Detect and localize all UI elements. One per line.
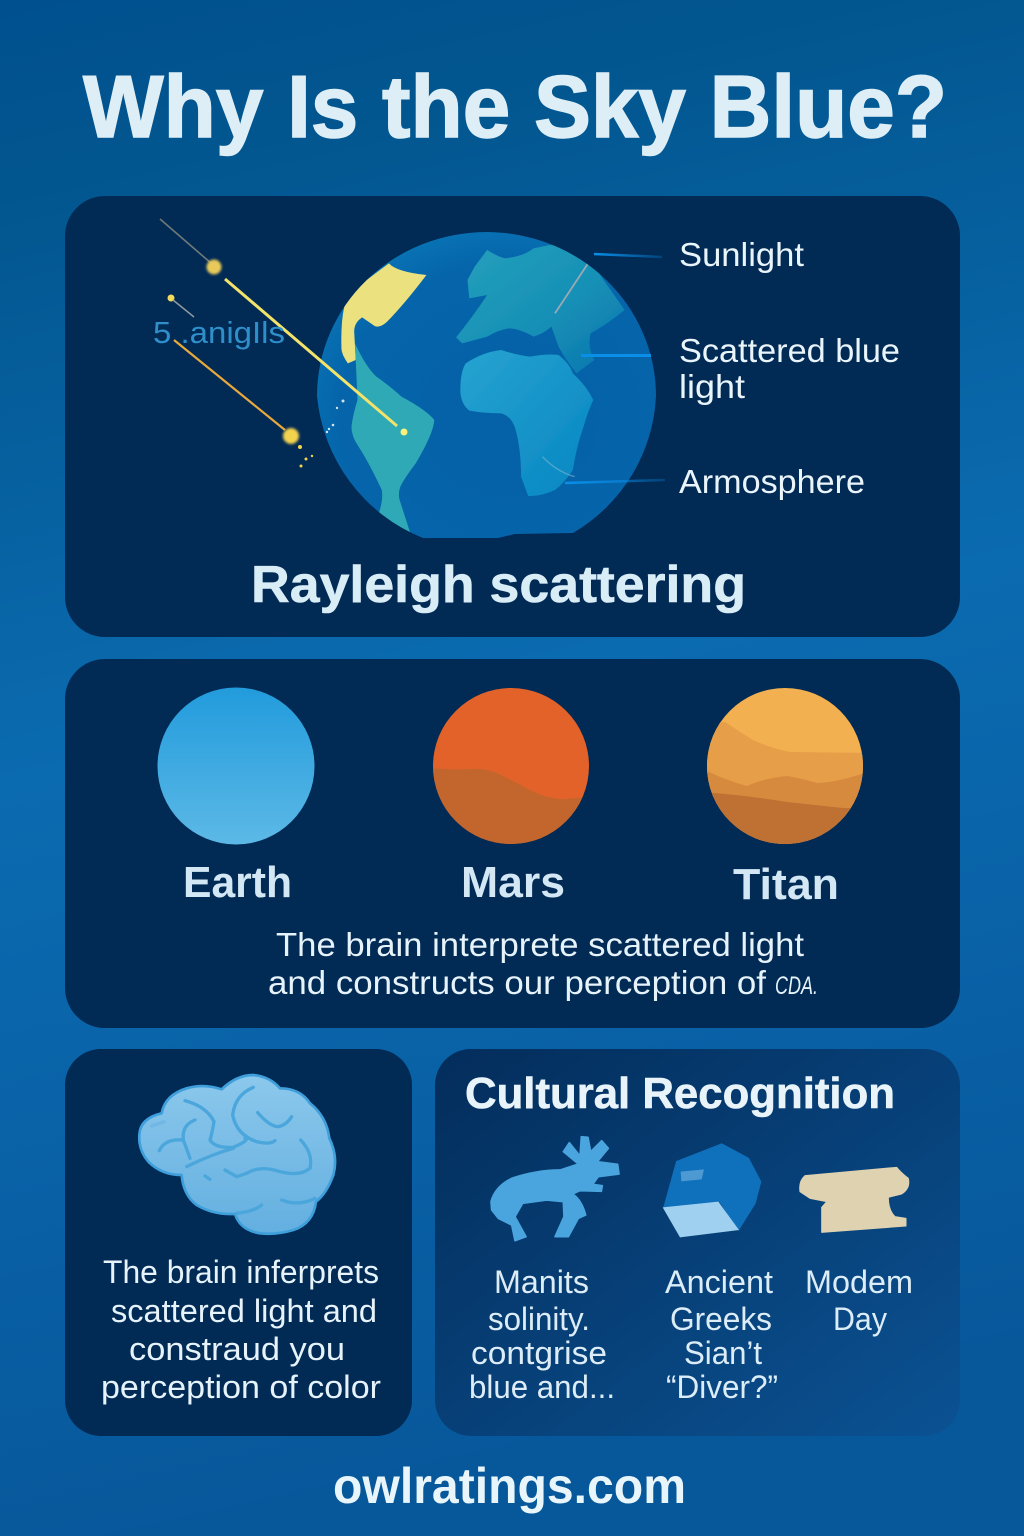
label: Scattered blue light <box>679 332 900 405</box>
text: Ancient Greeks column <box>665 1264 778 1405</box>
icon: Titan <box>707 688 863 844</box>
text block: perception: CDA. <box>775 972 818 1000</box>
text block: brain: scattered light and <box>111 1293 377 1329</box>
label: Mars: Mars <box>461 858 565 907</box>
text block: perception: The brain interprete scattered light <box>276 926 804 963</box>
panel: planets <box>65 659 960 1028</box>
label: Armosphere: Armosphere <box>679 463 865 500</box>
text: Ancient Greeks column: Greeks <box>670 1301 772 1337</box>
title: Why Is the Sky Blue? <box>83 57 947 156</box>
icon: Earth globe <box>310 225 665 545</box>
icon: Mars <box>433 688 589 844</box>
icon: beige column <box>800 1167 909 1232</box>
text: Manits column: blue and... <box>469 1369 615 1405</box>
text: Manits column <box>469 1264 615 1405</box>
text block: perception: and constructs our perception of <box>268 964 767 1001</box>
text block: perception <box>268 926 818 1001</box>
label: Titan: Titan <box>733 860 839 909</box>
text block: brain: perception of color <box>101 1369 381 1405</box>
arrow: sunlight ray lower <box>168 294 313 468</box>
text: Manits column: solinity. <box>488 1301 590 1337</box>
icon: blue book <box>663 1144 761 1237</box>
text: Modern Day column: Modem <box>805 1264 913 1300</box>
text: Modern Day column <box>805 1264 913 1337</box>
text: Ancient Greeks column: Sian’t <box>684 1335 762 1371</box>
text block: brain: The brain inferprets <box>103 1254 379 1290</box>
panel: Rayleigh scattering <box>65 196 960 637</box>
text: Ancient Greeks column: Ancient <box>665 1264 773 1300</box>
panel: Cultural Recognition <box>435 1049 960 1436</box>
text: Ancient Greeks column: “Diver?” <box>666 1369 778 1405</box>
heading: Cultural Recognition: Cultural Recognition <box>465 1069 895 1118</box>
label: Earth: Earth <box>183 858 292 907</box>
text block: brain: constraud you <box>129 1331 345 1367</box>
label: Scattered blue light: Scattered blue <box>679 332 900 369</box>
text: Manits column: contgrise <box>471 1335 607 1371</box>
callout line: scattered blue light <box>581 354 651 357</box>
callout line: sunlight <box>594 254 662 257</box>
garbled label: 5 .anigIls <box>153 315 285 350</box>
text: Modern Day column: Day <box>833 1301 887 1337</box>
panel: brain <box>65 1049 412 1436</box>
icon: Earth <box>158 688 314 844</box>
label: Sunlight: Sunlight <box>679 236 804 273</box>
arrow: sunlight ray main <box>160 219 408 436</box>
scattered dots <box>326 400 344 433</box>
icon: brain <box>139 1075 335 1234</box>
icon: animal <box>491 1137 619 1241</box>
footer: site name: owlratings.com <box>333 1458 686 1514</box>
label: Scattered blue light: light <box>679 368 745 405</box>
heading: Rayleigh scattering: Rayleigh scattering <box>251 556 746 614</box>
text block: brain <box>101 1254 381 1405</box>
callout line: atmosphere <box>565 480 665 483</box>
text: Manits column: Manits <box>494 1264 589 1300</box>
